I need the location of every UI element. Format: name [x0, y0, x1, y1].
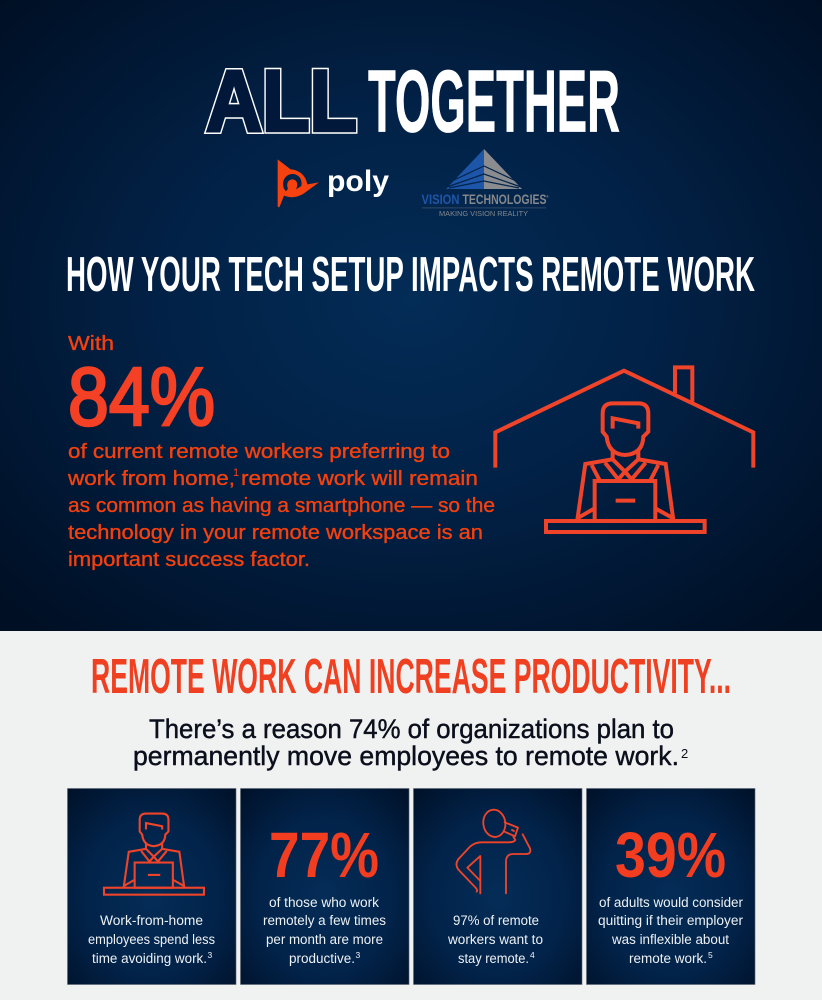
text: 97% of remote workers want to stay remote: 97% of remote — [453, 913, 539, 929]
logo: poly — [278, 159, 389, 207]
panel: 77 percent card — [240, 788, 409, 984]
text: of adults would consider quitting: was inflexible about — [611, 932, 729, 948]
panel: work-from-home employees card — [68, 788, 236, 984]
text: of adults would consider quitting: 5 — [708, 950, 713, 960]
text block: 84 percent statistic: work from home, — [67, 468, 235, 490]
text block: 84 percent statistic: of current remote workers preferring to — [68, 441, 450, 463]
number: 77%: 77% — [269, 819, 379, 891]
logo: Vision Technologies: MAKING VISION REALITY — [439, 209, 528, 218]
text block: 84 percent statistic: as common as having a smartphone — so the — [68, 495, 495, 517]
icon: person working at laptop inside a house — [495, 367, 753, 532]
text: of adults would consider quitting: quitting if their employer — [598, 913, 743, 929]
text: of those who work remotely: per month are more — [266, 932, 383, 948]
logo: Vision Technologies: ® — [546, 194, 549, 199]
text block: 84 percent statistic: 84% — [68, 350, 215, 443]
text: of adults would consider quitting: of adults would consider — [599, 895, 743, 911]
text: of those who work remotely: remotely a few times — [263, 913, 386, 929]
text: work-from-home employees spend less time avoiding work: 3 — [208, 950, 212, 960]
text: 97% of remote workers want to stay remote: workers want to — [447, 932, 543, 948]
text block: 84 percent statistic: technology in your remote workspace is an — [68, 522, 483, 544]
text block: 84 percent statistic — [67, 333, 495, 571]
text: 97% of remote workers want to stay remote: stay remote. — [458, 951, 529, 967]
text: of adults would consider quitting — [598, 895, 743, 967]
logo: Vision Technologies: VISION — [422, 191, 460, 207]
text block: 84 percent statistic: 1 — [233, 467, 239, 479]
text block: 74 percent of organizations — [133, 714, 688, 771]
logo: Vision Technologies — [422, 149, 549, 218]
text block: 74 percent of organizations: 2 — [681, 746, 688, 761]
text: work-from-home employees spend less time avoiding work: time avoiding work. — [92, 951, 207, 967]
panel: 39 percent card — [586, 788, 755, 984]
text: 97% of remote workers want to stay remote — [447, 913, 543, 967]
title: All Together: ALL — [206, 54, 357, 150]
text: of adults would consider quitting: remote work. — [629, 951, 707, 967]
text: work-from-home employees spend less time avoiding work: employees spend less — [88, 932, 215, 948]
text block: 84 percent statistic: important success factor. — [68, 549, 310, 571]
text block: 84 percent statistic: With — [68, 333, 114, 355]
text: work-from-home employees spend less time avoiding work — [88, 913, 215, 967]
text: of those who work remotely — [263, 895, 386, 967]
panel: light productivity section background — [0, 631, 822, 1000]
text: of those who work remotely: productive. — [289, 951, 355, 967]
panel: 97 percent want to stay remote card — [414, 788, 582, 984]
title: All Together — [206, 52, 620, 150]
title: All Together: ALL — [206, 54, 357, 150]
number: 39%: 39% — [615, 819, 726, 891]
logo: poly: poly — [327, 165, 389, 198]
logo: Vision Technologies: TECHNOLOGIES — [462, 191, 546, 207]
text: 97% of remote workers want to stay remote: 4 — [530, 950, 535, 960]
icon: person on the phone — [456, 808, 530, 893]
text block: 84 percent statistic: remote work will remain — [241, 468, 478, 490]
icon: person at laptop — [104, 814, 204, 895]
text block: 74 percent of organizations: permanently move employees to remote work. — [133, 741, 679, 771]
text: of those who work remotely: of those who work — [269, 895, 380, 911]
text block: 74 percent of organizations: There’s a reason 74% of organizations plan to — [149, 714, 674, 744]
text: work-from-home employees spend less time avoiding work: Work-from-home — [100, 913, 203, 929]
text: of those who work remotely: 3 — [356, 950, 360, 960]
panel: dark hero background — [0, 0, 822, 631]
